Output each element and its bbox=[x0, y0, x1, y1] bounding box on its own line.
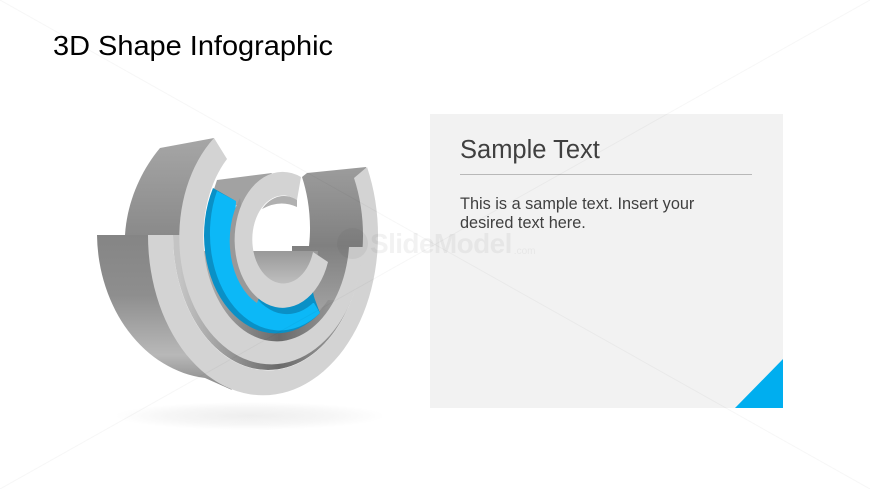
blue ring lower dark edge bbox=[252, 288, 315, 314]
inner ring shaded edge bbox=[230, 198, 262, 303]
title: 3D Shape Infographic bbox=[53, 30, 333, 61]
backing between second ring and blue ring bbox=[205, 251, 347, 332]
corner triangle accent bbox=[735, 359, 783, 408]
backing between outer and second ring bbox=[173, 235, 363, 370]
panel body text: This is a sample text. Insert your bbox=[460, 195, 694, 213]
center bowl wall bbox=[248, 251, 318, 295]
panel: text card bbox=[430, 114, 783, 408]
blue ring bbox=[204, 188, 320, 333]
inner C ring bbox=[235, 172, 328, 308]
second ring bbox=[179, 138, 363, 364]
blue ring face bbox=[210, 191, 320, 330]
ground shadow bbox=[115, 402, 385, 430]
blue ring dark body bbox=[204, 188, 320, 333]
panel body text bbox=[460, 195, 694, 232]
right back wall bbox=[292, 167, 368, 300]
left outer wall bbox=[97, 235, 232, 390]
panel body text: desired text here. bbox=[460, 214, 586, 232]
upper left wall bbox=[125, 138, 214, 235]
inner C top shade bbox=[262, 196, 297, 209]
center back wall bbox=[213, 173, 272, 212]
outer ring bbox=[148, 167, 378, 395]
watermark: SlideModel.com bbox=[370, 228, 535, 259]
panel heading: Sample Text bbox=[460, 136, 600, 164]
